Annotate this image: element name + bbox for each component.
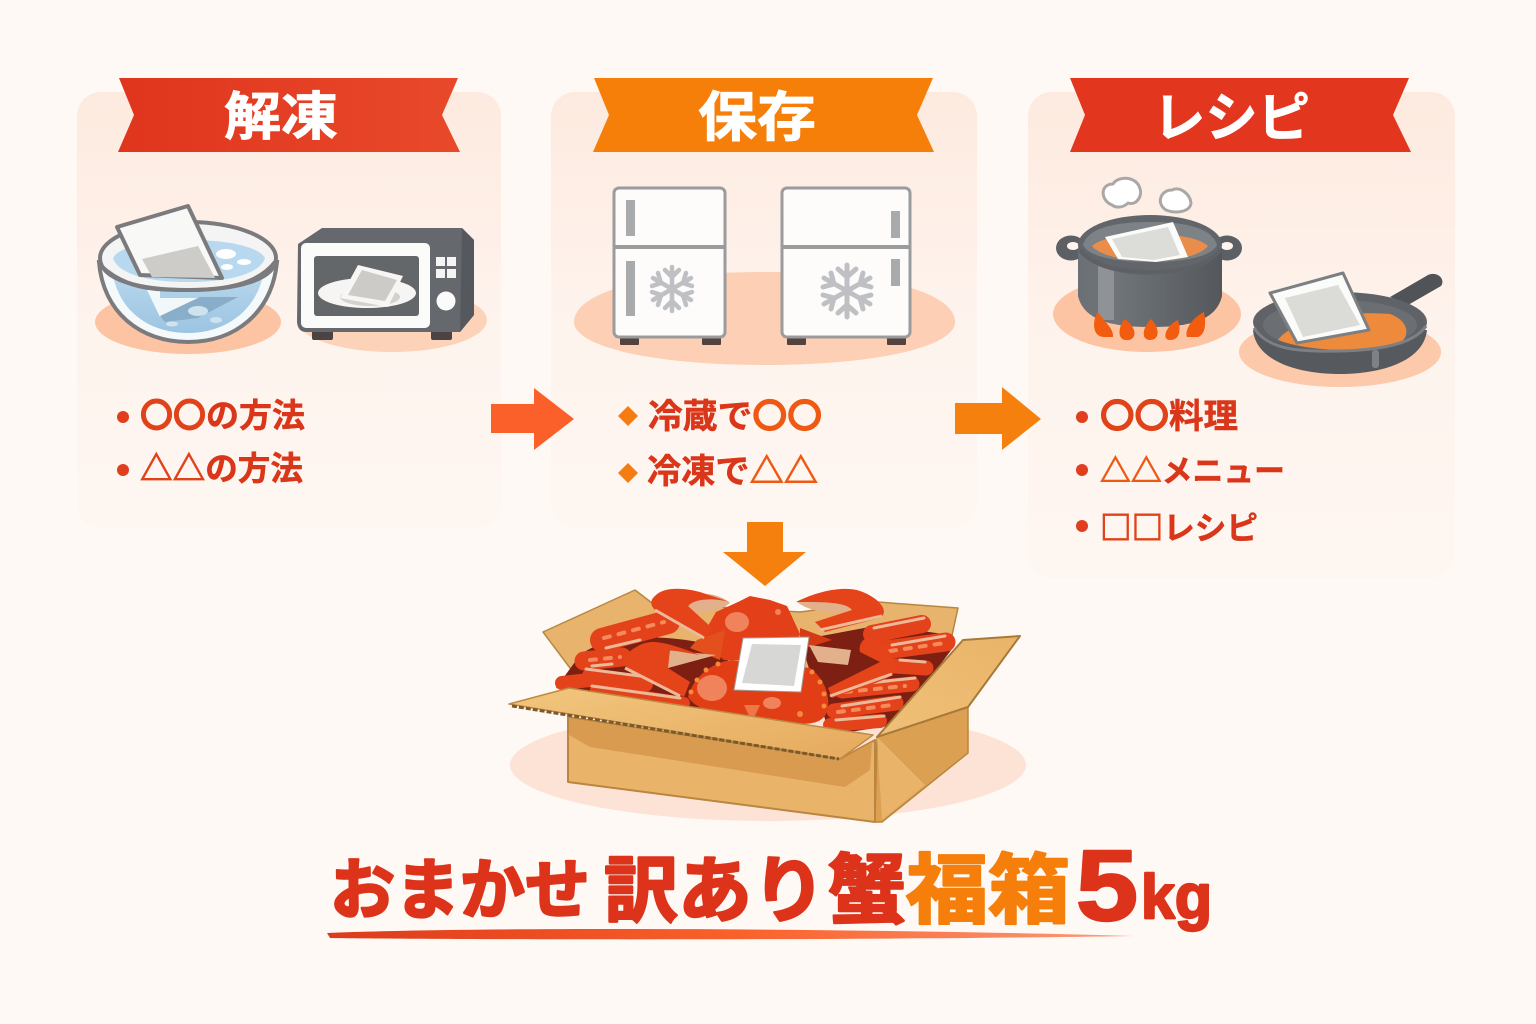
crab bbox=[556, 589, 955, 735]
crab side legs bbox=[562, 618, 946, 725]
arrow: down to box bbox=[723, 522, 806, 586]
steam bbox=[1103, 178, 1191, 212]
box right face bbox=[875, 707, 968, 822]
title: 訳あり bbox=[604, 852, 826, 932]
icon: fridge 1 bbox=[614, 188, 725, 345]
box flap shadow bbox=[569, 718, 872, 787]
crab shell bbox=[688, 660, 828, 724]
icon: snowflake large bbox=[823, 265, 871, 317]
title: おまかせ bbox=[330, 853, 590, 927]
panel: 保存 bbox=[551, 78, 977, 528]
icon: fridge 2 bbox=[782, 188, 910, 345]
list: レシピ: △△メニュー bbox=[1100, 446, 1285, 491]
floor ellipse bbox=[574, 272, 955, 365]
arrow: 解凍 to 保存 bbox=[491, 388, 574, 450]
ribbon: 解凍 heading: 解凍 bbox=[224, 89, 338, 147]
list: 保存: 冷凍で△△ bbox=[647, 444, 818, 493]
panel: 解凍 bbox=[77, 78, 501, 528]
list: レシピ bbox=[1076, 389, 1285, 549]
crab shadow bbox=[556, 637, 730, 712]
crab carapace bbox=[700, 596, 800, 660]
crab upper claws bbox=[651, 589, 884, 638]
icon: snowflake bbox=[652, 267, 692, 311]
arrow: 保存 to レシピ bbox=[955, 387, 1041, 450]
list: 解凍: △△の方法 bbox=[140, 442, 303, 490]
illustration: crab box bbox=[509, 589, 1026, 822]
title: kg bbox=[1141, 863, 1212, 932]
list: 解凍 bbox=[117, 389, 305, 490]
list: 保存: 冷蔵で〇〇 bbox=[648, 389, 822, 438]
crab label bbox=[734, 637, 809, 692]
flames bbox=[1094, 312, 1205, 340]
box front face bbox=[568, 717, 875, 822]
ribbon: 保存 heading: 保存 bbox=[698, 88, 816, 148]
title underline bbox=[327, 929, 1133, 939]
ribbon: 保存 heading bbox=[593, 78, 934, 152]
list: 解凍: 〇〇の方法 bbox=[140, 389, 305, 437]
panel: レシピ bbox=[1028, 78, 1455, 578]
list: レシピ: 〇〇料理 bbox=[1100, 389, 1238, 438]
box back flaps bbox=[543, 590, 958, 690]
title: 5 bbox=[1076, 830, 1138, 942]
icon: microwave bbox=[297, 228, 487, 352]
icon: pot on flame bbox=[1053, 178, 1242, 352]
ribbon: レシピ heading: レシピ bbox=[1153, 89, 1310, 148]
list: 保存 bbox=[618, 389, 822, 493]
ribbon: 解凍 heading bbox=[118, 78, 460, 152]
icon: frying pan bbox=[1239, 273, 1442, 387]
list: レシピ: □□レシピ bbox=[1100, 503, 1258, 549]
title bbox=[330, 830, 1212, 942]
crab lower claws bbox=[624, 638, 895, 698]
ribbon: レシピ heading bbox=[1070, 78, 1411, 152]
title: 蟹 bbox=[828, 849, 906, 934]
box front flap bbox=[509, 688, 873, 759]
box right flap bbox=[877, 636, 1020, 737]
icon: bowl of water with packet bbox=[95, 206, 281, 354]
title: 福箱 bbox=[906, 849, 1070, 934]
